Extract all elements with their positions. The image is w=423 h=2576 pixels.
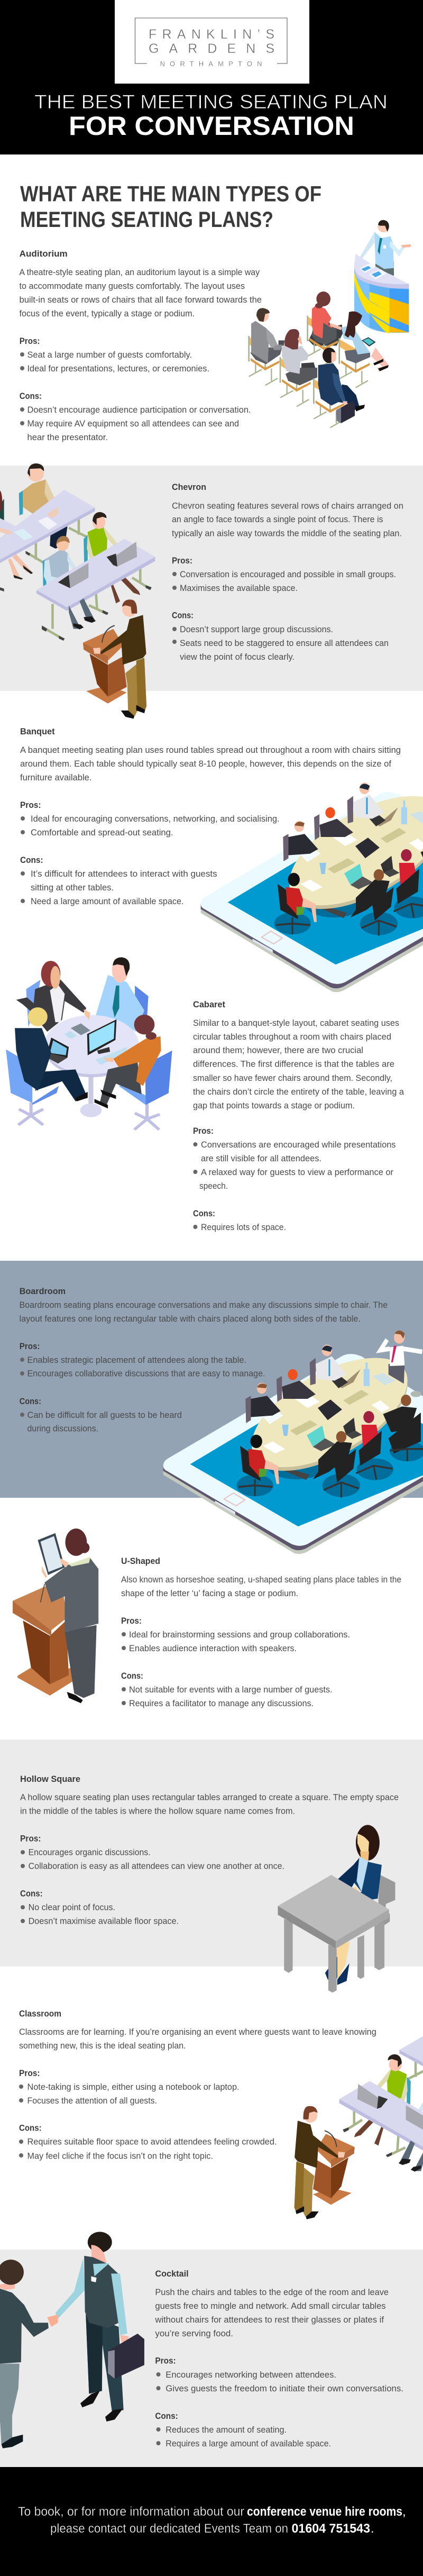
auditorium cons <box>20 392 251 442</box>
footer call to action: conference venue hire rooms <box>247 2505 402 2519</box>
hollow square pros: Collaboration is easy as all attendees can view one another at once. <box>29 1861 284 1871</box>
banquet cons: Cons: <box>20 855 43 865</box>
cabaret description: circular tables throughout a room with chairs placed <box>193 1032 391 1042</box>
boardroom cons <box>20 1397 182 1434</box>
u-shaped heading: U-Shaped <box>121 1556 160 1566</box>
boardroom pros: Encourages collaborative discussions that are easy to manage. <box>27 1369 265 1379</box>
cocktail cons: Requires a large amount of available space. <box>165 2439 331 2448</box>
hollow square cons: No clear point of focus. <box>29 1903 115 1913</box>
cocktail description: you’re serving food. <box>155 2329 233 2338</box>
classroom cons: Cons: <box>19 2124 42 2133</box>
cocktail pros: Pros: <box>155 2356 176 2366</box>
auditorium pros <box>20 336 209 374</box>
panel: boardroom <box>0 1261 423 1554</box>
cabaret description <box>193 1018 404 1110</box>
classroom pros: Pros: <box>19 2069 40 2078</box>
cabaret description: around them; however, there are two crucial <box>193 1046 363 1055</box>
cabaret pros: speech. <box>199 1181 228 1191</box>
auditorium pros: Ideal for presentations, lectures, or ceremonies. <box>27 364 209 374</box>
panel: auditorium <box>19 220 411 442</box>
chevron cons: view the point of focus clearly. <box>180 652 295 662</box>
panel: chevron <box>0 463 423 719</box>
banquet description: furniture available. <box>20 773 92 782</box>
chevron pros <box>172 556 396 593</box>
cabaret description: the chairs don’t circle the entirety of the table, leaving a <box>193 1087 404 1097</box>
panel: classroom <box>19 2006 423 2219</box>
hollow square description: in the middle of the tables is where the hollow square name comes from. <box>20 1806 295 1816</box>
classroom description: something new, this is the ideal seating plan. <box>19 2041 186 2051</box>
title line 1: THE BEST MEETING SEATING PLAN <box>34 91 388 113</box>
cocktail pros <box>155 2356 403 2393</box>
hollow square pros: Pros: <box>20 1834 41 1843</box>
u-shaped description <box>121 1575 401 1598</box>
classroom pros <box>19 2069 239 2106</box>
chevron description: typically an aisle way towards the middle of the seating plan. <box>172 529 402 538</box>
presenter desk <box>354 254 409 333</box>
chevron pros: Conversation is encouraged and possible in small groups. <box>180 570 396 579</box>
cabaret pros: A relaxed way for guests to view a performance or <box>201 1168 393 1177</box>
classroom cons <box>19 2124 277 2161</box>
chevron description <box>172 502 403 538</box>
cocktail cons: Cons: <box>155 2411 178 2421</box>
auditorium description: to accommodate many guests comfortably. The layout uses <box>19 281 245 291</box>
auditorium cons: Cons: <box>20 392 42 401</box>
u-shaped cons: Not suitable for events with a large number of guests. <box>129 1685 333 1695</box>
cocktail description: guests free to mingle and network. Add small circular tables <box>155 2301 386 2311</box>
cabaret heading: Cabaret <box>193 1000 225 1009</box>
u-shaped cons: Requires a facilitator to manage any discussions. <box>129 1699 314 1708</box>
cabaret description: smaller so have fewer chairs around them. Secondly, <box>193 1073 392 1083</box>
hollow square cons: Doesn’t maximise available floor space. <box>29 1917 179 1926</box>
cabaret pros: Pros: <box>193 1126 214 1136</box>
illustration: banquet table on tablet <box>201 769 423 992</box>
cocktail description: without chairs for attendees to rest their glasses or plates if <box>154 2315 384 2325</box>
illustration: chevron speaker <box>83 599 146 719</box>
classroom description <box>19 2027 376 2051</box>
boardroom pros <box>20 1342 265 1379</box>
chevron cons <box>172 611 389 662</box>
illustration: woman at table <box>278 1825 395 1992</box>
auditorium description <box>19 268 262 318</box>
banquet cons <box>20 855 217 906</box>
footer call to action: , <box>402 2505 406 2519</box>
panel: hollow square <box>0 1740 423 1992</box>
footer call to action: To book, or for more information about our <box>18 2505 244 2519</box>
banquet cons: It’s difficult for attendees to interact with guests <box>31 869 217 879</box>
cocktail description: Push the chairs and tables to the edge of the room and leave <box>155 2288 389 2297</box>
chevron pros: Pros: <box>172 556 192 566</box>
panel: u-shaped <box>13 1528 401 1708</box>
banquet description <box>20 745 401 782</box>
chevron cons: Seats need to be staggered to ensure all attendees can <box>180 639 389 648</box>
classroom pros: Focuses the attention of all guests. <box>27 2096 157 2106</box>
hollow square heading: Hollow Square <box>20 1774 80 1784</box>
u-shaped cons: Cons: <box>121 1671 143 1681</box>
cabaret description: Similar to a banquet-style layout, cabaret seating uses <box>193 1018 399 1028</box>
banquet pros <box>20 800 280 838</box>
footer call to action: 01604 751543 <box>292 2522 370 2536</box>
chevron pros: Maximises the available space. <box>180 584 298 593</box>
header band <box>0 0 423 154</box>
u-shaped cons <box>121 1671 333 1708</box>
cabaret description: differences. The first difference is that the tables are <box>193 1059 394 1069</box>
classroom cons: Requires suitable floor space to avoid attendees feeling crowded. <box>27 2137 277 2147</box>
auditorium cons: May require AV equipment so all attendees can see and <box>27 419 239 429</box>
u-shaped pros: Enables audience interaction with speakers. <box>129 1644 297 1653</box>
hollow square pros <box>20 1834 284 1871</box>
auditorium pros: Pros: <box>20 336 40 346</box>
boardroom cons: Cons: <box>20 1397 41 1406</box>
boardroom heading: Boardroom <box>20 1287 66 1296</box>
u-shaped pros: Pros: <box>121 1616 142 1626</box>
banquet pros: Ideal for encouraging conversations, networking, and socialising. <box>31 814 280 824</box>
heading: main types: MEETING SEATING PLANS? <box>20 207 273 232</box>
hollow square cons <box>20 1889 179 1926</box>
classroom pros: Note-taking is simple, either using a notebook or laptop. <box>27 2082 239 2092</box>
logo: GARDENS <box>149 41 274 56</box>
chevron cons: Doesn’t support large group discussions. <box>180 625 333 634</box>
hollow square description: A hollow square seating plan uses rectangular tables arranged to create a square. The empty space <box>20 1792 399 1802</box>
classroom heading: Classroom <box>19 2009 61 2019</box>
boardroom pros: Pros: <box>20 1342 40 1351</box>
illustration: classroom rows <box>339 2006 423 2183</box>
logo <box>115 0 309 84</box>
footer call to action <box>0 2467 423 2576</box>
hollow square description <box>20 1792 399 1816</box>
cocktail pros: Gives guests the freedom to initiate their own conversations. <box>165 2384 403 2393</box>
cabaret cons: Requires lots of space. <box>201 1223 286 1232</box>
illustration: chevron rows <box>0 463 155 641</box>
boardroom description: Boardroom seating plans encourage conversations and make any discussions simple to chair. The <box>19 1300 388 1310</box>
panel: cabaret <box>6 957 404 1232</box>
u-shaped pros: Ideal for brainstorming sessions and group collaborations. <box>129 1630 350 1640</box>
logo: FRANKLIN’S <box>149 27 274 42</box>
panel: cocktail <box>0 2232 423 2467</box>
cocktail description <box>154 2288 389 2338</box>
cocktail heading: Cocktail <box>155 2269 189 2279</box>
heading: main types <box>20 181 321 232</box>
cabaret cons <box>193 1209 286 1232</box>
cocktail cons: Reduces the amount of seating. <box>165 2425 287 2435</box>
boardroom cons: during discussions. <box>27 1424 98 1434</box>
illustration: auditorium <box>249 220 411 427</box>
title line 2: FOR CONVERSATION <box>69 111 354 141</box>
boardroom description <box>19 1300 388 1324</box>
panel: banquet <box>20 727 423 992</box>
banquet pros: Comfortable and spread-out seating. <box>31 828 173 838</box>
u-shaped description: Also known as horseshoe seating, u-shaped seating plans place tables in the <box>121 1575 401 1585</box>
hollow square cons: Cons: <box>20 1889 43 1899</box>
cocktail pros: Encourages networking between attendees. <box>165 2370 336 2380</box>
illustration: woman at podium <box>13 1528 98 1703</box>
illustration: cabaret table <box>6 957 172 1130</box>
auditorium pros: Seat a large number of guests comfortably. <box>27 350 192 360</box>
cabaret cons: Cons: <box>193 1209 215 1218</box>
u-shaped pros <box>121 1616 350 1653</box>
cocktail cons <box>155 2411 331 2448</box>
banquet description: A banquet meeting seating plan uses round tables spread out throughout a room with chairs sitting <box>20 745 401 755</box>
auditorium description: focus of the event, typically a stage or podium. <box>19 309 195 318</box>
chevron heading: Chevron <box>172 483 206 492</box>
cabaret description: gap that points towards a stage or podium. <box>193 1101 355 1110</box>
banquet cons: sitting at other tables. <box>31 883 114 893</box>
illustration: boardroom table on tablet <box>163 1331 423 1554</box>
seated attendees <box>249 292 389 427</box>
chevron description: an angle to face towards a single point of focus. There is <box>172 515 383 524</box>
auditorium cons: Doesn’t encourage audience participation or conversation. <box>27 405 251 415</box>
auditorium description: A theatre-style seating plan, an auditorium layout is a simple way <box>19 268 260 277</box>
classroom cons: May feel cliche if the focus isn’t on the right topic. <box>27 2152 213 2161</box>
boardroom pros: Enables strategic placement of attendees along the table. <box>27 1355 246 1365</box>
chevron cons: Cons: <box>172 611 194 621</box>
illustration: classroom speaker <box>295 2106 355 2219</box>
cabaret pros: Conversations are encouraged while presentations <box>201 1140 396 1150</box>
banquet heading: Banquet <box>20 727 55 736</box>
hollow square pros: Encourages organic discussions. <box>29 1847 151 1857</box>
logo: NORTHAMPTON <box>160 60 262 68</box>
banquet pros: Pros: <box>20 800 41 810</box>
auditorium cons: hear the presentator. <box>27 433 108 442</box>
heading: main types: WHAT ARE THE MAIN TYPES OF <box>20 181 321 206</box>
banquet cons: Need a large amount of available space. <box>31 897 184 906</box>
footer call to action: please contact our dedicated Events Team on <box>50 2522 288 2536</box>
auditorium heading: Auditorium <box>20 249 68 259</box>
cabaret pros: are still visible for all attendees. <box>201 1154 321 1163</box>
chevron description: Chevron seating features several rows of chairs arranged on <box>172 502 403 511</box>
u-shaped description: shape of the letter ‘u’ facing a stage or podium. <box>121 1589 298 1598</box>
illustration: handshake <box>0 2232 144 2448</box>
banquet description: around them. Each table should typically seat 8-10 people, however, this depends on the size of <box>20 759 391 769</box>
classroom description: Classrooms are for learning. If you’re organising an event where guests want to leave knowing <box>19 2027 376 2037</box>
footer call to action: . <box>371 2522 374 2536</box>
boardroom description: layout features one long rectangular table with chairs placed along both sides of the table. <box>19 1314 361 1324</box>
cabaret pros <box>193 1126 396 1191</box>
auditorium description: built-in seats or rows of chairs that all face forward towards the <box>19 295 262 305</box>
boardroom cons: Can be difficult for all guests to be heard <box>27 1410 182 1420</box>
presenter <box>356 220 411 276</box>
